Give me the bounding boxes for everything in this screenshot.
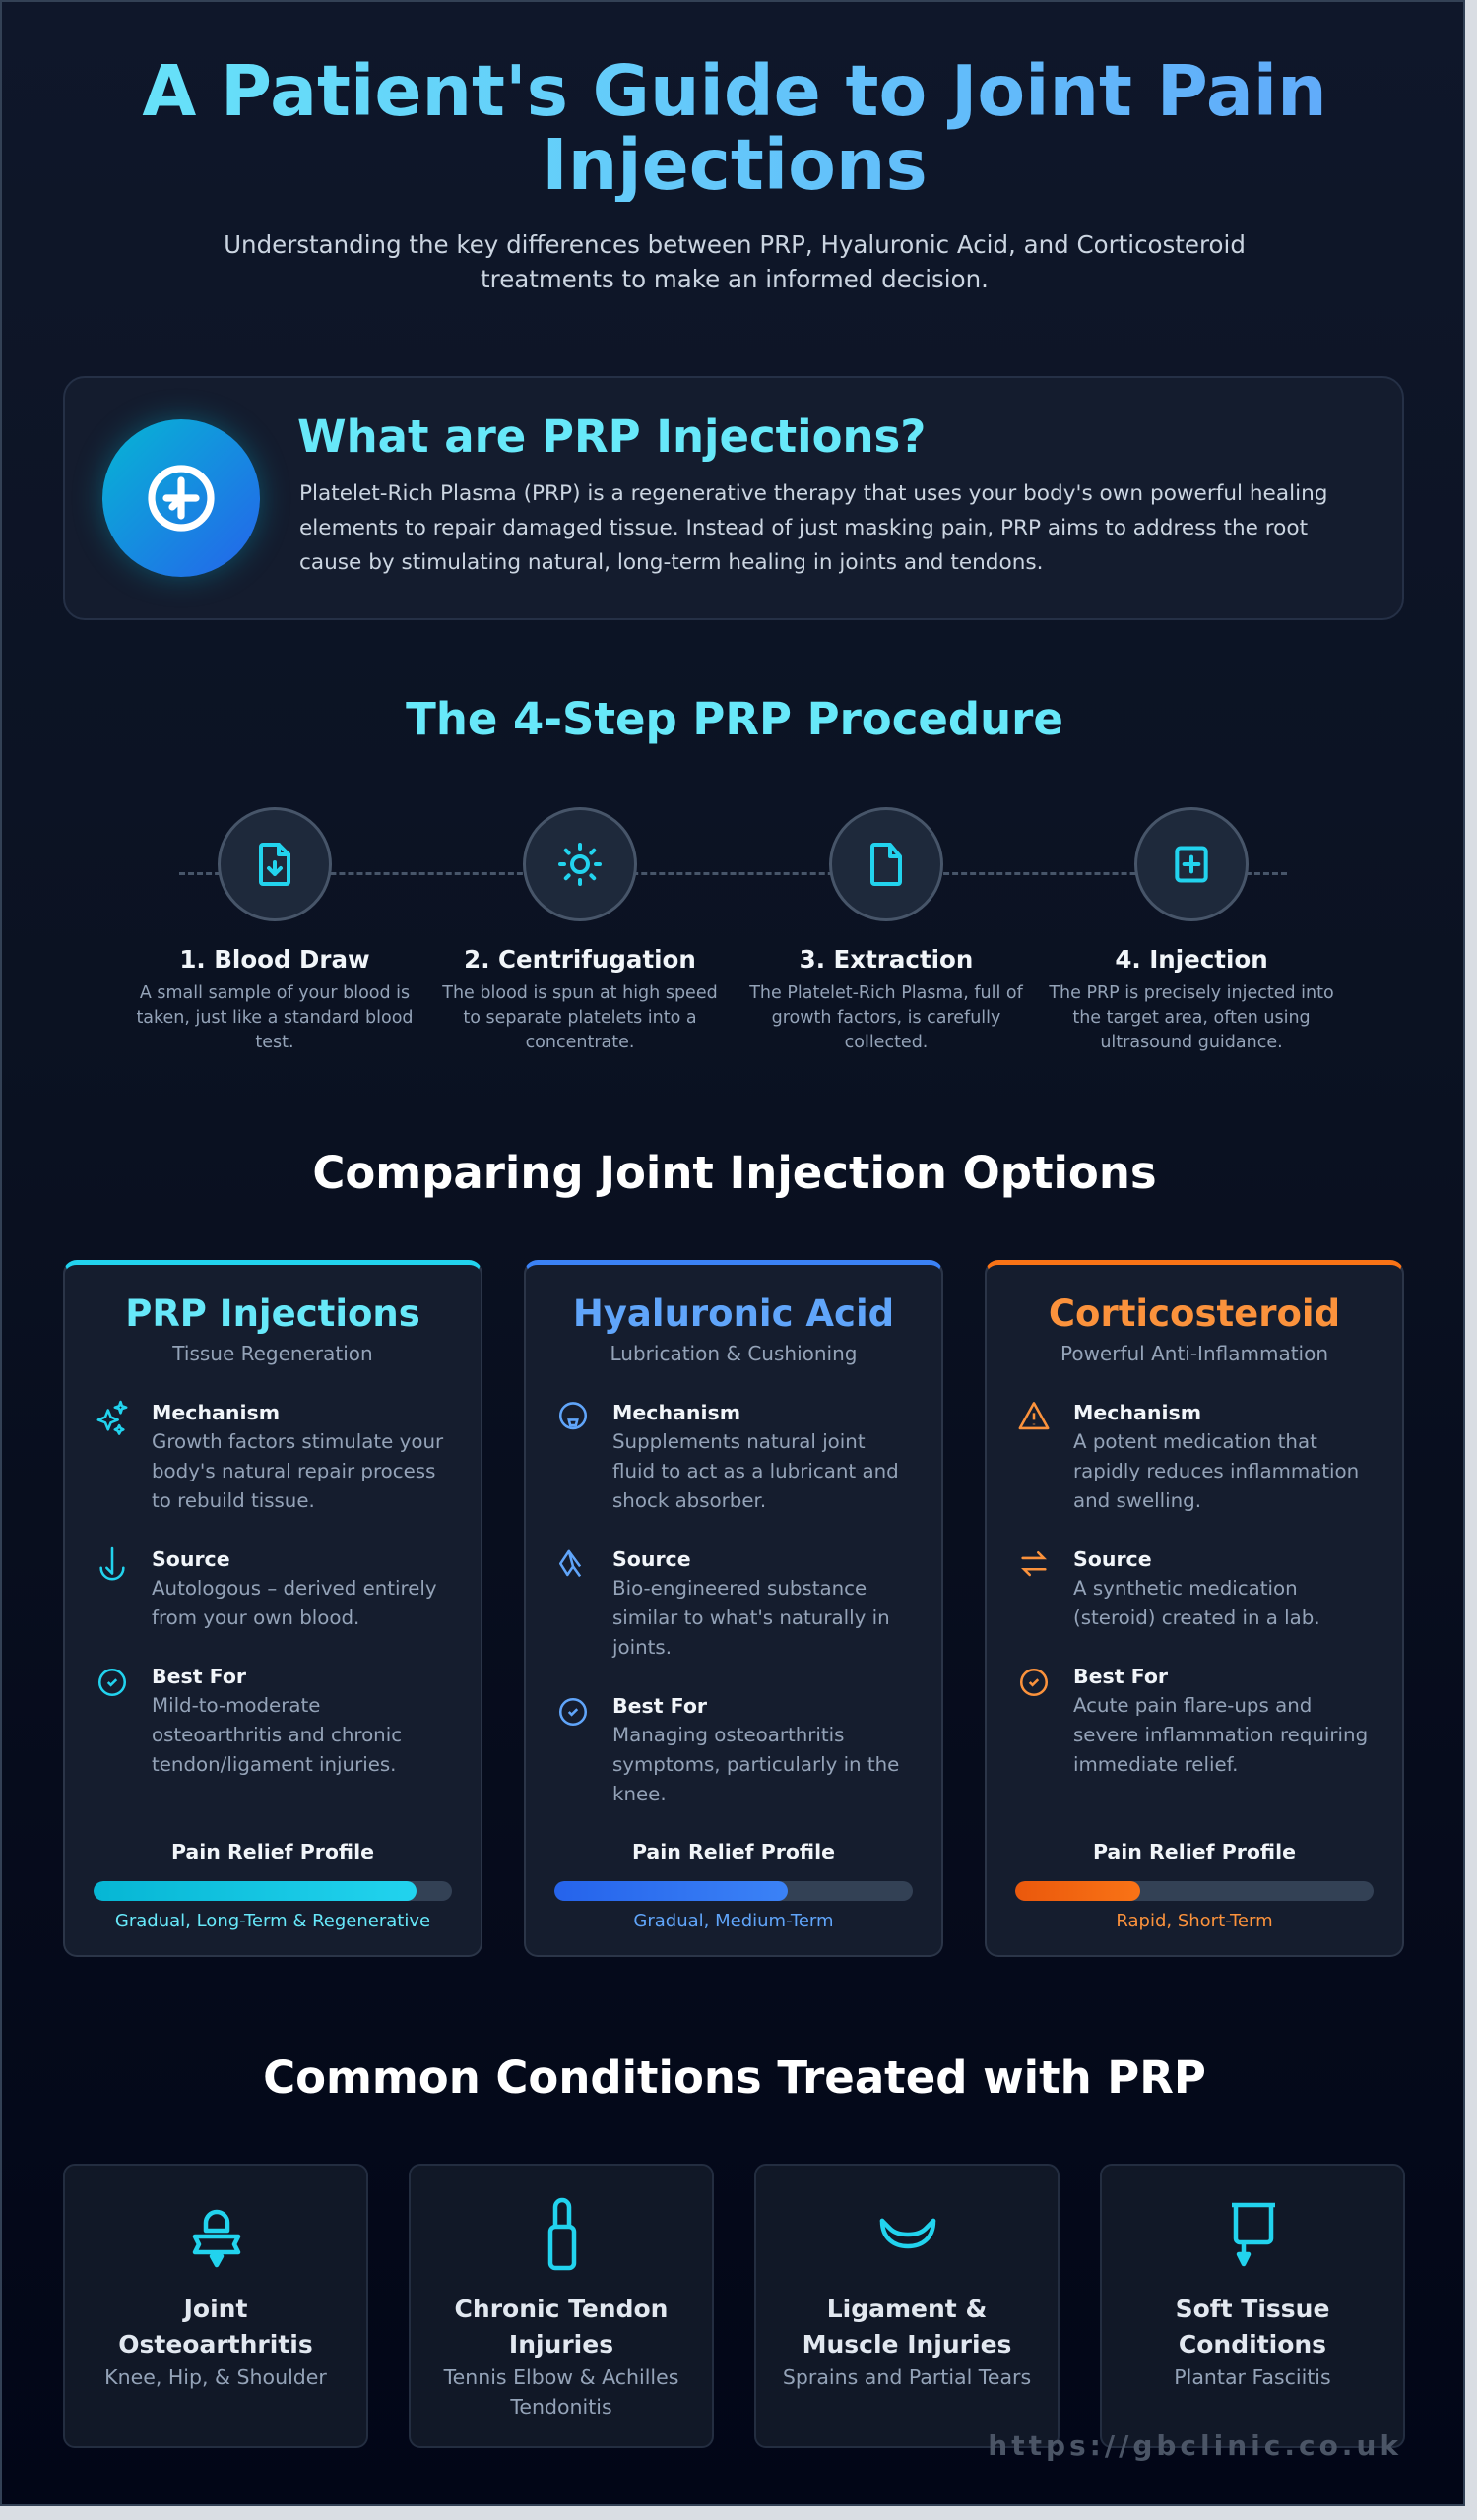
item: best for: Best For [1073, 1665, 1168, 1688]
heading: What are PRP Injections? [297, 410, 926, 463]
step 3 [749, 807, 1024, 1052]
condition: ligament & muscle: Sprains and Partial Tears [783, 2365, 1031, 2389]
card: PRP: PRP Injections [125, 1292, 420, 1335]
icon: tissue [1232, 2203, 1275, 2266]
item: mechanism: A potent medication that rapidly reduces inflammation and swelling. [1073, 1430, 1359, 1512]
step 4: 4. Injection [1115, 945, 1268, 974]
item: source: Source [152, 1547, 230, 1571]
item: source: Source [1073, 1547, 1152, 1571]
icon: plus square [1134, 807, 1249, 921]
condition: joint osteoarthritis: Osteoarthritis [118, 2330, 313, 2359]
icon: PRP circle [102, 419, 260, 577]
step 2 [442, 807, 718, 1052]
icon: lock [547, 2197, 577, 2270]
item: mechanism: Supplements natural joint fluid to act as a lubricant and shock absorber. [612, 1430, 899, 1512]
panel: what are PRP injections [63, 376, 1404, 620]
step 2: The blood is spun at high speed to separate platelets into a concentrate. [442, 983, 718, 1052]
item: mechanism: Mechanism [152, 1401, 280, 1424]
card: hyaluronic acid: Lubrication & Cushioning [610, 1342, 857, 1365]
heading: common conditions: Common Conditions Treated with PRP [263, 2051, 1206, 2104]
heading: 4-step procedure: The 4-Step PRP Procedure [406, 693, 1063, 745]
title: A Patient's Guide to Joint Pain [142, 50, 1327, 132]
card: corticosteroid: Powerful Anti-Inflammation [1060, 1342, 1328, 1365]
condition: joint osteoarthritis [63, 2164, 368, 2448]
pain relief profile [554, 1840, 913, 1931]
step 1 [136, 807, 414, 1052]
step 4 [1049, 807, 1334, 1052]
heading: comparing options: Comparing Joint Injection Options [312, 1147, 1157, 1199]
paragraph: Platelet-Rich Plasma (PRP) is a regenerative therapy that uses your body's own powerful healing elements to repair damaged tissue. Instead of just masking pain, PRP aims to address the root cause by stimulating natural, long-term healing in joints and tendons. [299, 481, 1327, 575]
item: source [99, 1547, 437, 1629]
condition: ligament & muscle [754, 2164, 1060, 2448]
item: source: A synthetic medication (steroid) created in a lab. [1073, 1577, 1320, 1629]
icon: file [829, 807, 943, 921]
card: hyaluronic acid: Hyaluronic Acid [573, 1292, 894, 1335]
condition: joint osteoarthritis: Joint [184, 2295, 247, 2323]
step 4: The PRP is precisely injected into the target area, often using ultrasound guidance. [1049, 983, 1334, 1052]
step 3: The Platelet-Rich Plasma, full of growth factors, is carefully collected. [749, 983, 1023, 1052]
card: hyaluronic acid [524, 1260, 943, 1957]
pain relief profile: Pain Relief Profile [632, 1840, 835, 1863]
dashed connector line [179, 872, 1287, 875]
condition: chronic tendon injuries: Chronic Tendon [455, 2295, 668, 2323]
item: source: Autologous – derived entirely from your own blood. [152, 1577, 437, 1629]
card: corticosteroid [985, 1260, 1404, 1957]
icon: band [880, 2219, 935, 2248]
item: mechanism [559, 1401, 899, 1512]
title [2, 54, 1467, 202]
item: best for: Acute pain flare-ups and severe inflammation requiring immediate relief. [1073, 1694, 1368, 1776]
condition: joint osteoarthritis: Knee, Hip, & Shoulder [104, 2365, 327, 2389]
card: PRP: Tissue Regeneration [172, 1342, 373, 1365]
title: Injections [542, 124, 928, 206]
step 1: 1. Blood Draw [179, 945, 370, 974]
icon: file download [218, 807, 332, 921]
item: source [1021, 1547, 1320, 1629]
item: source: Bio-engineered substance similar to what's naturally in joints. [612, 1577, 890, 1659]
item: best for [1020, 1665, 1368, 1776]
condition: soft tissue [1100, 2164, 1405, 2448]
card: PRP [63, 1260, 482, 1957]
icon: joint [193, 2209, 240, 2268]
step 1: A small sample of your blood is taken, just like a standard blood test. [136, 983, 414, 1052]
item: best for [559, 1694, 899, 1805]
item: mechanism [96, 1400, 443, 1512]
item: best for: Managing osteoarthritis symptoms, particularly in the knee. [612, 1724, 899, 1805]
condition: chronic tendon injuries: Injuries [509, 2330, 613, 2359]
item: best for: Mild-to-moderate osteoarthritis and chronic tendon/ligament injuries. [152, 1694, 402, 1776]
item: source: Source [612, 1547, 691, 1571]
icon: sun [523, 807, 637, 921]
condition: chronic tendon injuries [409, 2164, 714, 2448]
condition: chronic tendon injuries: Tennis Elbow & Achilles Tendonitis [444, 2365, 678, 2419]
card: corticosteroid: Corticosteroid [1049, 1292, 1340, 1335]
step 3: 3. Extraction [800, 945, 973, 974]
subtitle: Understanding the key differences between PRP, Hyaluronic Acid, and Corticosteroid treatments to make an informed decision. [224, 230, 1246, 293]
condition: soft tissue: Plantar Fasciitis [1174, 2365, 1331, 2389]
pain relief profile: Rapid, Short-Term [1116, 1911, 1273, 1931]
pain relief profile [94, 1840, 452, 1931]
item: mechanism: Growth factors stimulate your body's natural repair process to rebuild tissue. [152, 1430, 443, 1512]
condition: soft tissue: Conditions [1179, 2330, 1326, 2359]
item: source [559, 1547, 890, 1659]
watermark: https://gbclinic.co.uk [988, 2429, 1402, 2462]
pain relief profile: Pain Relief Profile [1093, 1840, 1296, 1863]
item: mechanism: Mechanism [612, 1401, 740, 1424]
pain relief profile [1015, 1840, 1374, 1931]
item: mechanism: Mechanism [1073, 1401, 1201, 1424]
condition: ligament & muscle: Ligament & [827, 2295, 987, 2323]
item: best for: Best For [612, 1694, 707, 1718]
pain relief profile: Gradual, Long-Term & Regenerative [115, 1911, 430, 1931]
condition: soft tissue: Soft Tissue [1176, 2295, 1329, 2323]
item: best for [98, 1665, 402, 1776]
step 2: 2. Centrifugation [464, 945, 696, 974]
pain relief profile: Pain Relief Profile [171, 1840, 374, 1863]
item: mechanism [1018, 1401, 1359, 1512]
condition: ligament & muscle: Muscle Injuries [803, 2330, 1011, 2359]
item: best for: Best For [152, 1665, 246, 1688]
pain relief profile: Gradual, Medium-Term [633, 1911, 834, 1931]
